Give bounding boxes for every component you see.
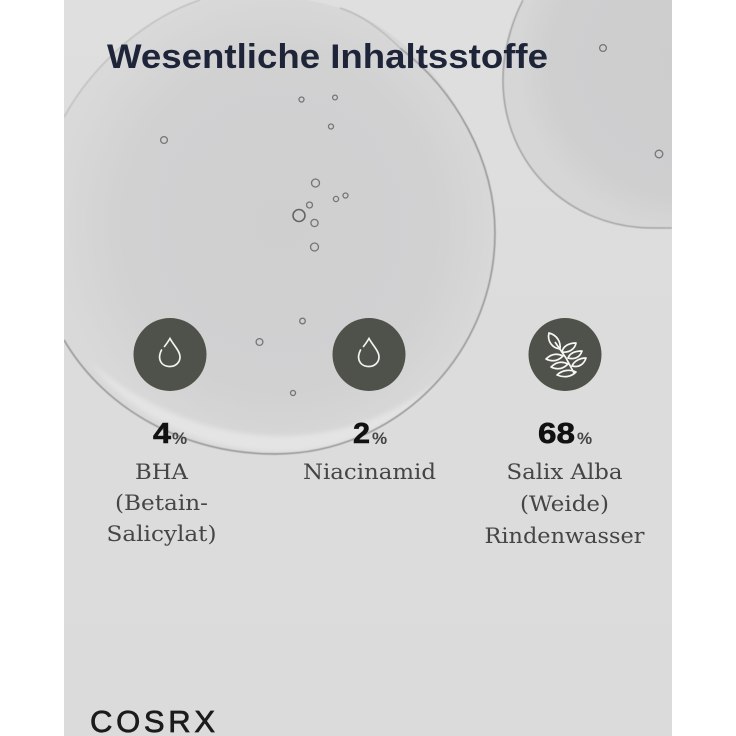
label: Niacinamid: Niacinamid bbox=[303, 460, 436, 484]
label: BHA (Betain-Salicylat): Salicylat) bbox=[106, 522, 216, 546]
percentage: 68% bbox=[538, 418, 592, 450]
label: Salix Alba (Weide) Rindenwasser: (Weide) bbox=[520, 492, 609, 516]
ingredient: Salix Alba bbox=[484, 318, 646, 548]
label: BHA (Betain-Salicylat): BHA bbox=[135, 460, 189, 484]
icon: water drop bbox=[134, 318, 206, 391]
label: Salix Alba (Weide) Rindenwasser: Salix Alba bbox=[506, 460, 622, 484]
air bubbles bbox=[161, 45, 663, 395]
percentage: 68%: % bbox=[577, 429, 592, 448]
percentage: 68%: 68 bbox=[538, 418, 575, 450]
right liquid droplet bbox=[502, 0, 672, 230]
percentage: 2%: % bbox=[372, 429, 387, 448]
percentage: 2% bbox=[353, 418, 387, 450]
percentage: 4%: 4 bbox=[153, 418, 171, 450]
label: Salix Alba (Weide) Rindenwasser: Rindenwasser bbox=[484, 524, 646, 548]
title: Wesentliche Inhaltsstoffe bbox=[107, 38, 548, 76]
icon: leaves bbox=[528, 318, 602, 391]
percentage: 4% bbox=[153, 418, 187, 450]
percentage: 4%: % bbox=[172, 429, 187, 448]
icon: water drop bbox=[332, 318, 406, 391]
ingredient: BHA bbox=[106, 318, 216, 546]
label: BHA (Betain-Salicylat): (Betain- bbox=[115, 491, 208, 515]
ingredient: Niacinamid bbox=[303, 318, 436, 484]
large liquid droplet bbox=[64, 0, 495, 454]
percentage: 2%: 2 bbox=[353, 418, 370, 450]
